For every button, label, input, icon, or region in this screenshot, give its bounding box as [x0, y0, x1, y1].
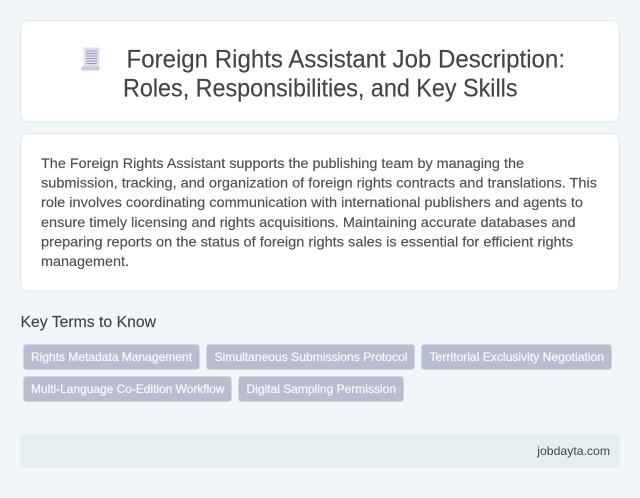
chip: co-edition workflow — [24, 376, 232, 402]
text block: description: preparing reports on the status of foreign rights sales is essential for efficient rights — [41, 233, 573, 249]
text block: description: ensure timely licensing and rights acquisitions. Maintaining accurate databases and — [41, 214, 576, 230]
chip: simultaneous submissions: Simultaneous Submissions Protocol — [214, 350, 408, 364]
heading: key terms: Key Terms to Know — [20, 314, 156, 331]
text block: description: submission, tracking, and organization of foreign rights contracts and translations. This — [41, 175, 597, 191]
footer: jobdayta.com — [536, 444, 610, 458]
panel: title card — [20, 20, 620, 122]
chip: digital sampling: Digital Sampling Permission — [246, 382, 396, 396]
chip: rights metadata: Rights Metadata Management — [31, 350, 193, 364]
chip: rights metadata — [24, 344, 200, 370]
panel: description card — [20, 134, 620, 291]
chip: co-edition workflow: Multi-Language Co-Edition Workflow — [31, 382, 225, 396]
panel: key term chips — [24, 344, 612, 402]
footer — [20, 434, 620, 468]
chip: simultaneous submissions — [206, 344, 414, 370]
text block: description — [41, 155, 597, 269]
chip: territorial exclusivity: Territorial Exclusivity Negotiation — [430, 350, 604, 364]
title: Roles, Responsibilities, and Key Skills — [123, 74, 518, 102]
icon: document scroll — [81, 48, 100, 70]
title: Foreign Rights Assistant Job Description: — [126, 46, 565, 74]
text block: description: role involves coordinating communication with international publishers and agents to — [41, 194, 583, 210]
text block: description: The Foreign Rights Assistant supports the publishing team by managing the — [41, 155, 524, 171]
text block: description: management. — [41, 253, 129, 269]
chip: territorial exclusivity — [422, 344, 612, 370]
title — [123, 46, 565, 102]
chip: digital sampling — [238, 376, 404, 402]
